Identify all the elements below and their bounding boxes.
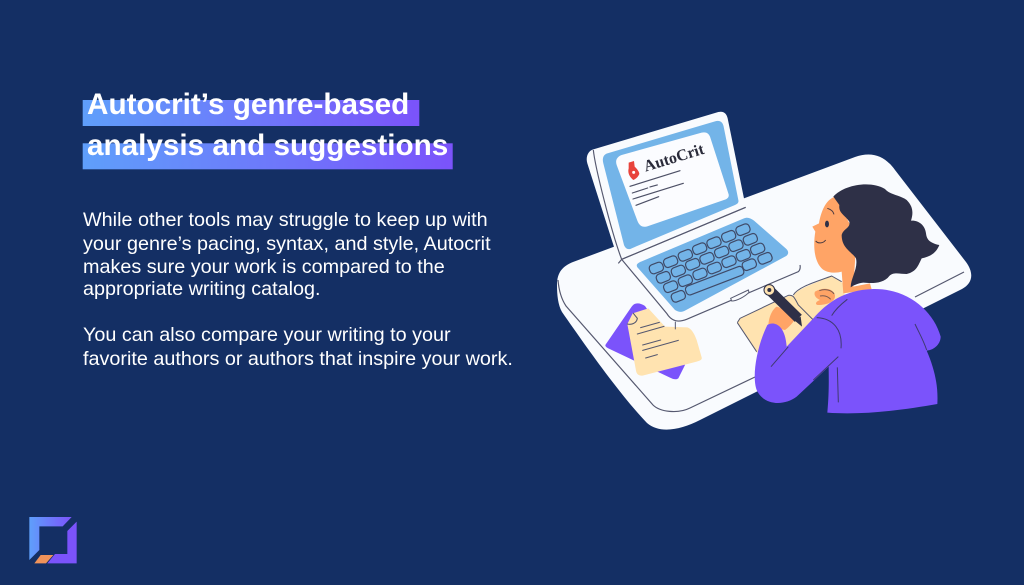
laptop base bbox=[618, 207, 803, 313]
facial features bbox=[816, 208, 834, 243]
logo right bracket bbox=[47, 522, 77, 563]
face and neck bbox=[812, 197, 872, 293]
keys bbox=[648, 223, 773, 303]
sweater fold lines bbox=[771, 299, 927, 402]
book bbox=[737, 276, 845, 353]
woman bbox=[737, 184, 941, 413]
document on screen bbox=[616, 132, 729, 227]
laptop bbox=[587, 112, 803, 321]
hair bbox=[833, 184, 939, 287]
laptop screen bbox=[603, 121, 738, 249]
writing hand bbox=[768, 307, 797, 330]
pen bbox=[764, 285, 802, 327]
title text: Autocrit’s genre-based bbox=[87, 88, 409, 121]
title bbox=[83, 88, 453, 169]
AutoCrit wordmark: AutoCrit bbox=[642, 141, 707, 175]
hand on book bbox=[814, 289, 835, 305]
laptop lid bbox=[587, 112, 746, 259]
pen nib logo bbox=[628, 161, 639, 180]
body paragraph 1: appropriate writing catalog. bbox=[83, 278, 321, 300]
body paragraph 1: your genre’s pacing, syntax, and style, Autocrit bbox=[83, 233, 491, 255]
body paragraph 1: While other tools may struggle to keep up with bbox=[83, 209, 488, 231]
purple sweater bbox=[755, 289, 941, 413]
desk bbox=[557, 155, 971, 430]
title highlight bar 1 bbox=[83, 100, 419, 126]
illustration: person at laptop bbox=[557, 112, 971, 430]
trackpad notch bbox=[731, 290, 749, 301]
logo orange accent bbox=[34, 555, 53, 563]
body paragraph 1: makes sure your work is compared to the bbox=[83, 256, 445, 278]
body paragraph 2: You can also compare your writing to your bbox=[83, 324, 451, 346]
cream note bbox=[627, 308, 702, 376]
logo left bracket bbox=[29, 517, 72, 560]
logo bbox=[29, 517, 77, 563]
title highlight bar 2 bbox=[83, 143, 453, 169]
document text lines bbox=[630, 171, 683, 205]
body paragraph 2: favorite authors or authors that inspire your work. bbox=[83, 348, 513, 370]
sticky notes bbox=[605, 303, 702, 379]
purple note bbox=[605, 303, 685, 379]
keyboard bbox=[637, 218, 788, 312]
title text: analysis and suggestions bbox=[87, 129, 448, 162]
